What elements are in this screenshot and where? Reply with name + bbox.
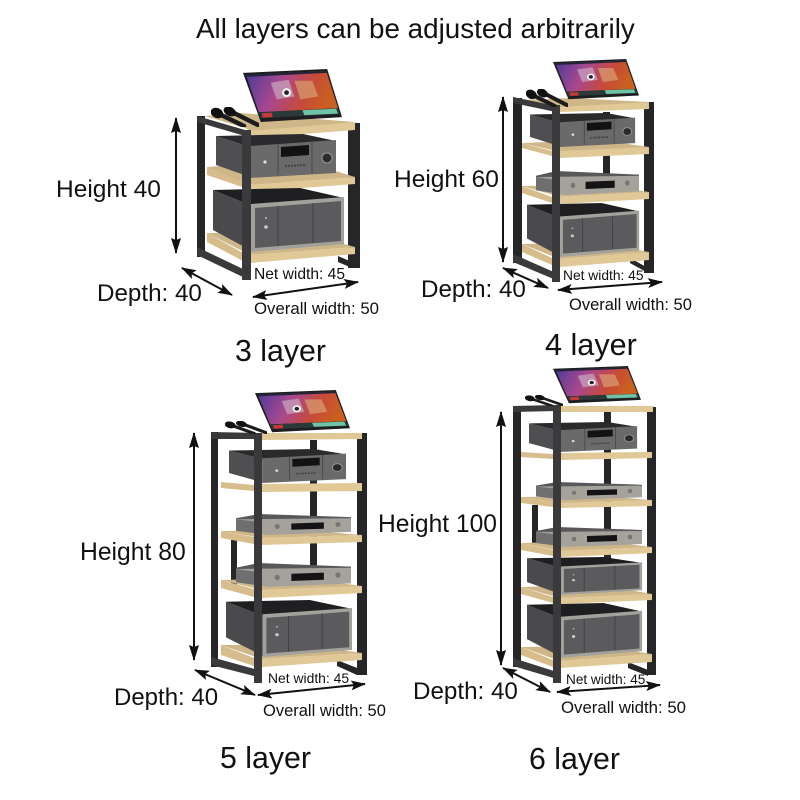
tablet [553, 366, 641, 403]
height arrow 80 [193, 433, 195, 660]
equipment: silver player [236, 563, 351, 587]
caption: 4 layer: 4 layer [545, 328, 637, 362]
equipment: receiver [530, 113, 635, 147]
label: height 100: Height 100 [378, 511, 497, 538]
rack shelves [205, 113, 355, 263]
panel: 4 layer rack [513, 59, 654, 282]
caption: 6 layer: 6 layer [529, 743, 620, 776]
equipment: amplifier [527, 203, 639, 257]
overall width arrow [557, 685, 660, 692]
rack frame: front post and beams [197, 116, 251, 280]
equipment: receiver [229, 449, 346, 483]
microphones [523, 394, 562, 405]
overall width arrow [258, 684, 365, 695]
label: depth 40: Depth: 40 [97, 280, 202, 307]
depth arrow 40 [182, 268, 232, 295]
rack frame: front post and beams [211, 432, 262, 683]
microphones [223, 419, 266, 433]
label: height 40: Height 40 [56, 176, 161, 203]
microphones [524, 87, 567, 106]
title: All layers can be adjusted arbitrarily [196, 13, 635, 44]
label: overall width: Overall width: 50 [561, 698, 686, 717]
equipment: receiver [529, 422, 637, 452]
rack shelves [221, 433, 362, 667]
panel: 6 layer rack [513, 366, 656, 683]
label: height 60: Height 60 [394, 166, 499, 193]
equipment: silver player [536, 527, 642, 547]
label: overall width: Overall width: 50 [254, 299, 379, 318]
label: overall width: Overall width: 50 [569, 296, 692, 314]
tablet [255, 390, 350, 432]
rack shelves [521, 406, 653, 668]
label: net width: Net width: 45 [268, 670, 349, 686]
rack frame: rear posts [211, 432, 367, 675]
height arrow 60 [502, 97, 504, 262]
equipment: silver player [536, 171, 639, 195]
rack frame: front post and beams [513, 97, 560, 282]
label: depth 40: Depth: 40 [413, 678, 518, 705]
panel: 3 layer rack [197, 69, 360, 280]
equipment: amplifier [213, 188, 344, 252]
rack shelves [522, 98, 649, 267]
equipment: silver player [236, 514, 351, 535]
equipment: amplifier [527, 557, 642, 595]
rack frame: front post and beams [513, 405, 561, 683]
microphones [209, 105, 258, 126]
rack frame: rear posts [197, 116, 360, 268]
label: depth 40: Depth: 40 [114, 684, 218, 711]
depth arrow 40 [195, 670, 255, 695]
label: overall width: Overall width: 50 [263, 702, 386, 720]
overall width arrow [558, 282, 662, 290]
tablet [243, 69, 342, 122]
height arrow 100 [500, 412, 502, 665]
label: net width: Net width: 45 [563, 268, 644, 283]
depth arrow 40 [503, 268, 548, 288]
equipment: amplifier [527, 603, 642, 658]
caption: 5 layer: 5 layer [220, 742, 311, 775]
rack frame: rear posts [513, 407, 656, 676]
label: net width: Net width: 45 [254, 266, 345, 283]
equipment: silver player [536, 482, 642, 500]
caption: 3 layer: 3 layer [235, 335, 326, 368]
depth arrow 40 [503, 668, 550, 692]
panel: 5 layer rack [211, 390, 367, 683]
rack frame: rear posts [513, 98, 654, 273]
label: depth 40: Depth: 40 [421, 276, 526, 303]
overall width arrow [253, 282, 358, 297]
height arrow 40 [175, 118, 177, 253]
label: net width: Net width: 45 [566, 672, 645, 687]
equipment: amplifier [226, 600, 352, 657]
equipment: receiver [216, 134, 336, 178]
tablet [553, 59, 639, 99]
label: height 80: Height 80 [80, 539, 186, 566]
